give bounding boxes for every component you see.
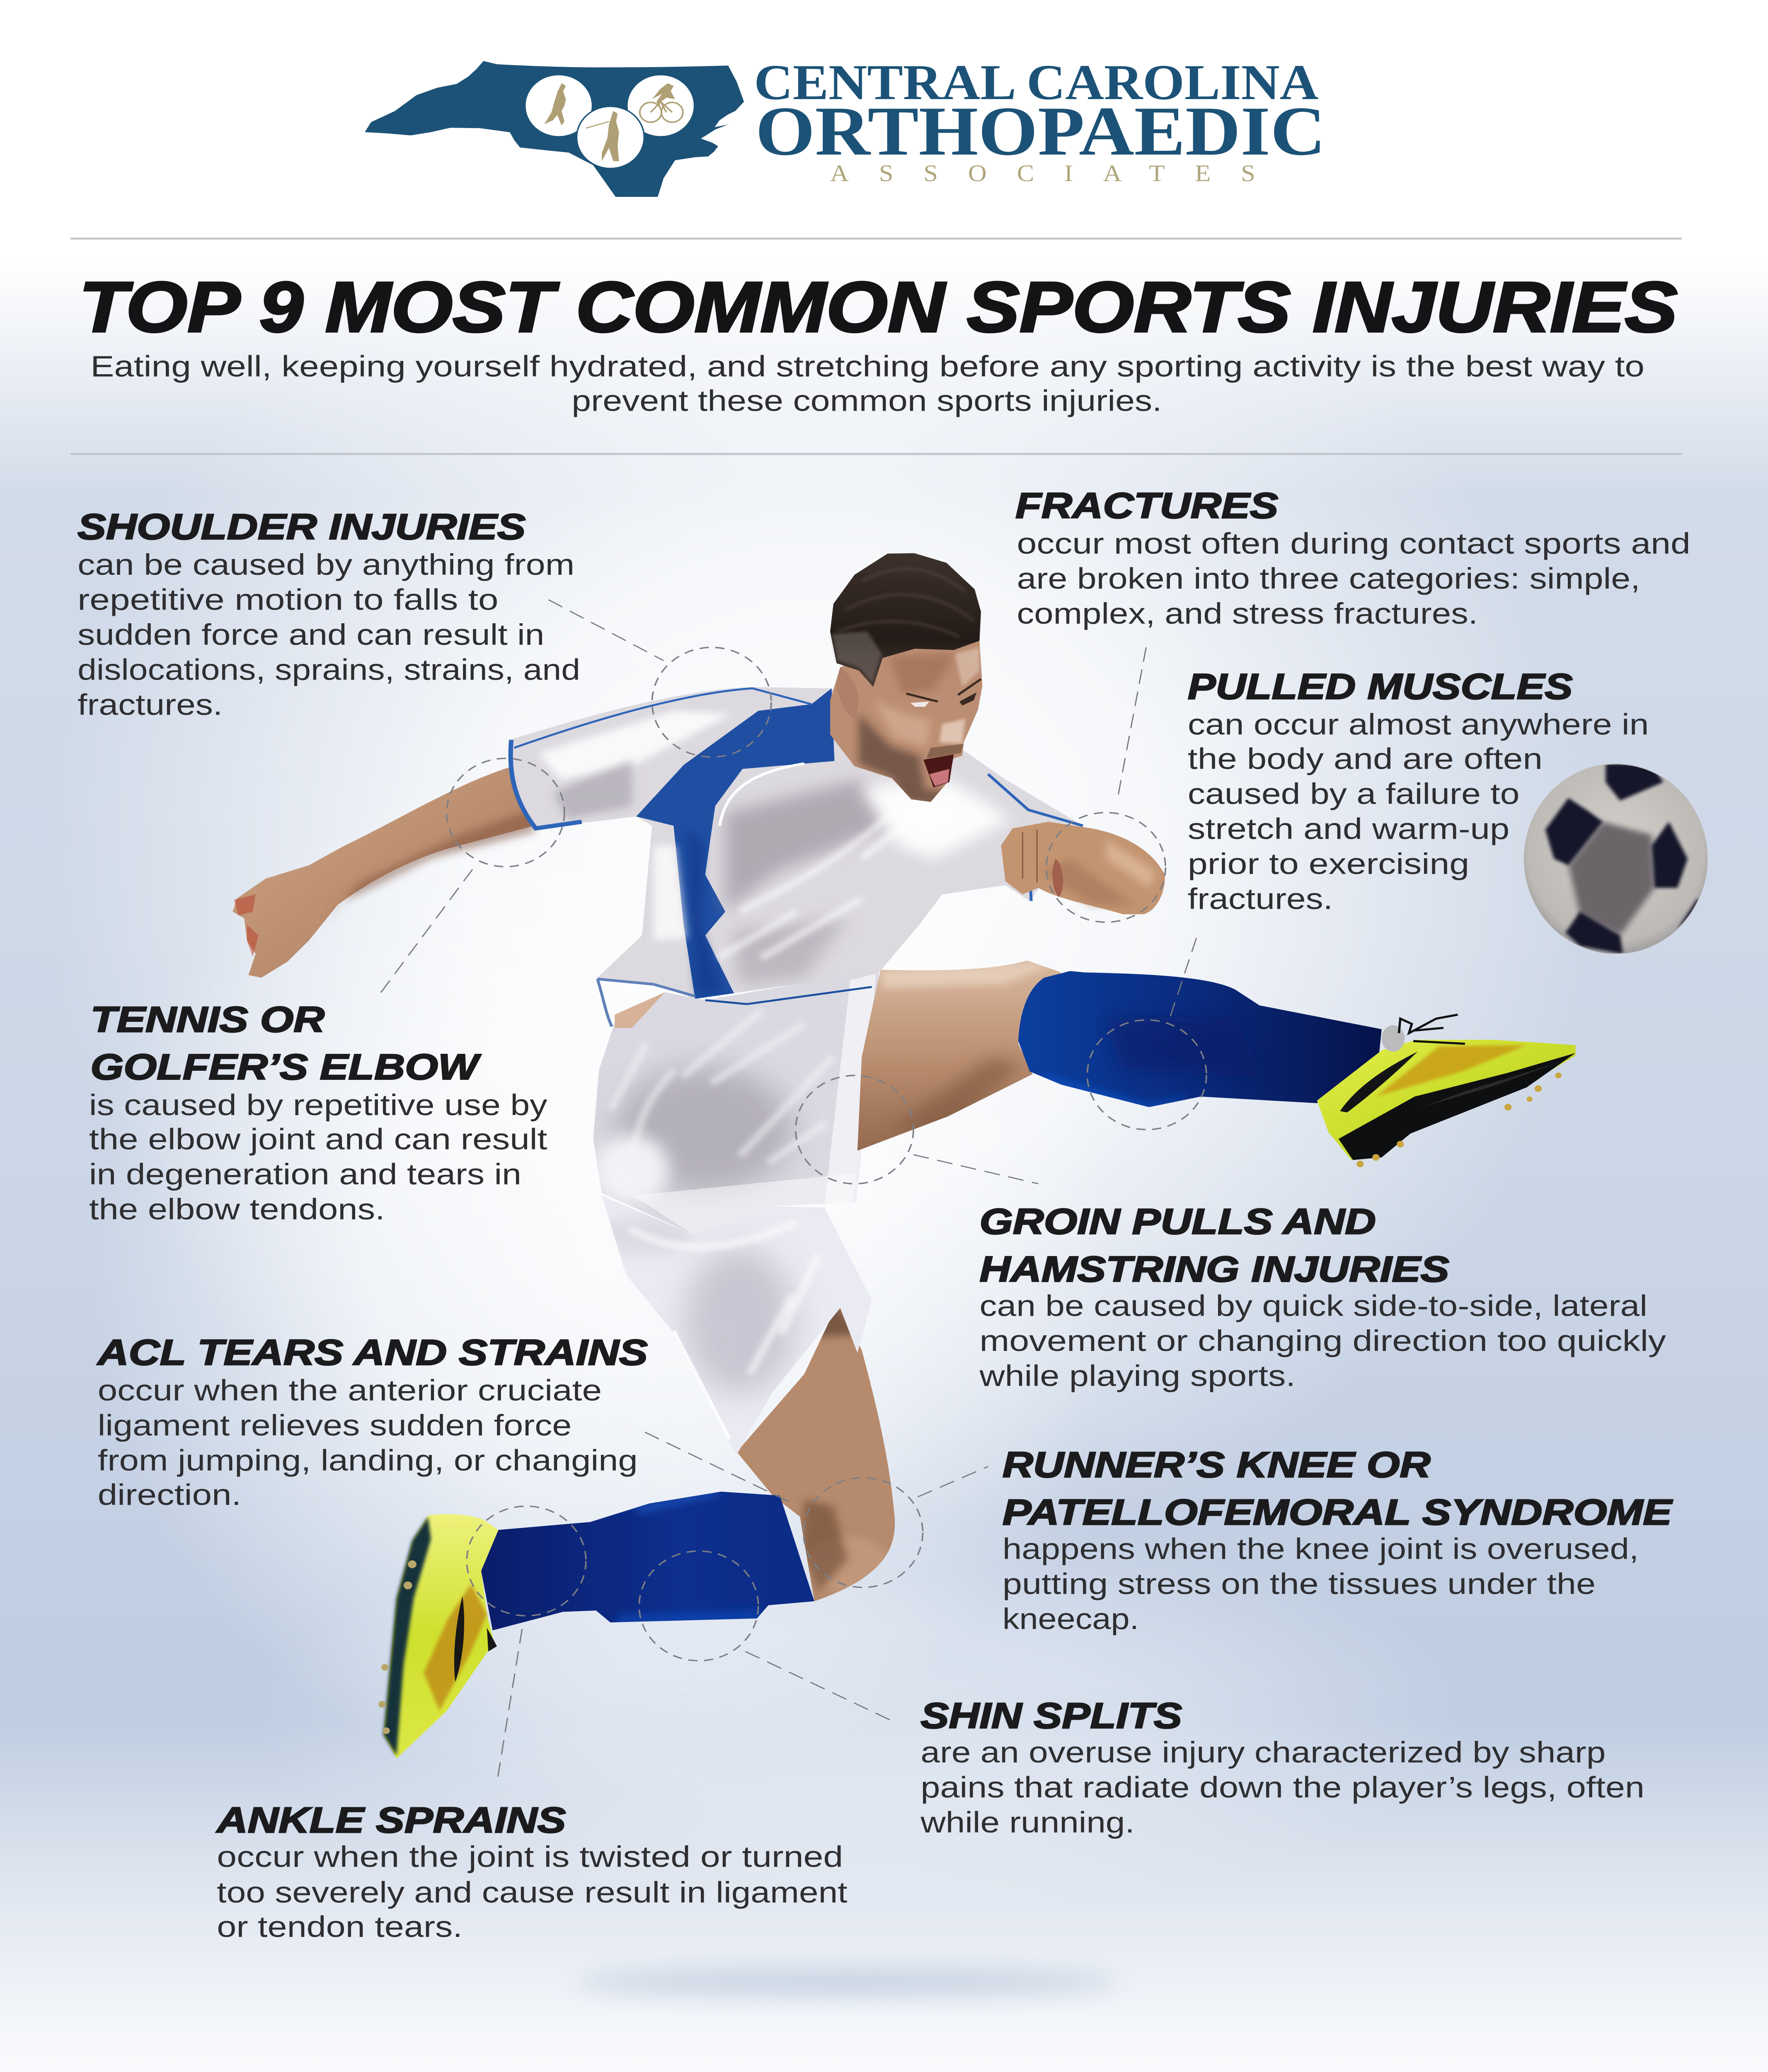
logo: Central Carolina Orthopaedic Associates <box>365 55 1326 197</box>
body text: movement or changing direction too quickly <box>979 1324 1666 1357</box>
panel: ACL tears and strains <box>97 1332 648 1511</box>
player lower shorts <box>601 1196 872 1455</box>
body text: can be caused by quick side-to-side, lateral <box>979 1289 1647 1322</box>
head: eyes and brows <box>906 679 981 707</box>
head: ear <box>837 667 859 719</box>
player raised shoe <box>1317 1015 1576 1167</box>
title: TOP 9 MOST COMMON SPORTS INJURIES <box>79 267 1678 347</box>
body text: is caused by repetitive use by <box>89 1088 547 1121</box>
heading: GROIN PULLS AND <box>979 1201 1376 1242</box>
intro text <box>90 350 1644 417</box>
heading: ANKLE SPRAINS <box>216 1800 566 1840</box>
logo circle: runner <box>526 75 592 136</box>
heading: SHOULDER INJURIES <box>78 506 526 547</box>
player lower shoe <box>378 1514 499 1758</box>
panel: pulled muscles <box>1188 666 1649 915</box>
body text: sudden force and can result in <box>78 618 544 651</box>
heading <box>979 1201 1449 1290</box>
heading: HAMSTRING INJURIES <box>979 1249 1449 1290</box>
logo circle: golfer <box>576 107 644 168</box>
player head <box>830 553 982 806</box>
injury marker: groin <box>796 1075 913 1184</box>
panel: groin pulls and hamstring injuries <box>979 1201 1666 1392</box>
leader line: ankle <box>497 1629 522 1782</box>
body text: pains that radiate down the player’s legs, often <box>920 1770 1644 1804</box>
injury marker: knee <box>804 1478 923 1588</box>
player raised sock <box>1018 971 1382 1116</box>
player right forearm and fist <box>1001 822 1165 914</box>
injury marker: wrist fracture <box>1046 813 1165 922</box>
body text: can occur almost anywhere in <box>1188 708 1649 741</box>
heading: TENNIS OR <box>90 999 325 1040</box>
body text: can be caused by anything from <box>78 548 574 581</box>
panel: shoulder injuries <box>78 506 580 721</box>
body text: direction. <box>98 1478 241 1511</box>
leader line: groin <box>913 1155 1039 1184</box>
body text: fractures. <box>78 688 223 721</box>
body text: are broken into three categories: simple, <box>1017 562 1640 595</box>
body text: putting stress on the tissues under the <box>1003 1567 1596 1600</box>
intro text: prevent these common sports injuries. <box>572 384 1162 417</box>
player lower thigh <box>737 1301 895 1601</box>
body text: occur when the anterior cruciate <box>98 1373 602 1407</box>
player upper shorts <box>593 970 879 1234</box>
body text: occur when the joint is twisted or turned <box>217 1840 843 1873</box>
panel: runner's knee <box>1003 1445 1673 1635</box>
logo wordmark line 1: CENTRAL CAROLINA <box>754 55 1318 110</box>
body text: complex, and stress fractures. <box>1017 597 1478 630</box>
player raised thigh <box>857 961 1061 1151</box>
logo wordmark line 3: ASSOCIATES <box>830 160 1255 186</box>
injury marker: shin <box>639 1551 758 1661</box>
body text: ligament relieves sudden force <box>98 1409 572 1442</box>
body text: happens when the knee joint is overused, <box>1003 1532 1639 1565</box>
leader line: ACL <box>645 1432 793 1503</box>
logo circle: cyclist <box>627 75 694 136</box>
leader line: runner's knee <box>918 1467 988 1497</box>
panel: tennis or golfer's elbow <box>89 999 547 1226</box>
leader line: shin <box>746 1651 894 1721</box>
body text <box>217 1840 848 1943</box>
player left arm and hand <box>233 766 534 978</box>
leader line: elbow <box>379 869 472 995</box>
leader line: shoulder <box>549 600 664 661</box>
heading: FRACTURES <box>1015 485 1278 526</box>
divider bottom <box>70 453 1682 455</box>
body text: or tendon tears. <box>217 1910 463 1943</box>
body text <box>979 1289 1666 1392</box>
panel: fractures <box>1015 485 1690 630</box>
body text: too severely and cause result in ligament <box>217 1876 848 1909</box>
body text <box>78 548 580 721</box>
heading: ACL TEARS AND STRAINS <box>97 1332 648 1373</box>
heading: PATELLOFEMORAL SYNDROME <box>1003 1492 1673 1532</box>
head: neck and face <box>830 641 982 806</box>
body text: the elbow joint and can result <box>89 1123 547 1156</box>
body text: caused by a failure to <box>1188 777 1519 810</box>
body text: occur most often during contact sports and <box>1017 527 1690 560</box>
heading <box>90 999 481 1087</box>
body text: the elbow tendons. <box>89 1193 385 1226</box>
body text <box>89 1088 547 1226</box>
leader line: pulled muscles <box>1169 938 1196 1020</box>
head: hair <box>830 553 981 687</box>
heading: PULLED MUSCLES <box>1188 666 1573 707</box>
leader line: fractures <box>1117 647 1146 799</box>
panel: ankle sprains <box>216 1800 848 1943</box>
body text: stretch and warm-up <box>1188 812 1509 845</box>
body text: are an overuse injury characterized by sharp <box>920 1736 1606 1769</box>
body text: while playing sports. <box>979 1359 1296 1392</box>
injury marker: elbow <box>447 758 564 867</box>
body text: the body and are often <box>1188 742 1543 775</box>
head: open mouth <box>923 754 954 787</box>
body text <box>1188 708 1649 915</box>
body text: fractures. <box>1188 882 1333 915</box>
player shirt <box>510 687 1083 1028</box>
body text: prior to exercising <box>1188 847 1469 880</box>
body text <box>1003 1532 1639 1635</box>
body text: while running. <box>920 1806 1135 1839</box>
body text: in degeneration and tears in <box>89 1157 521 1191</box>
body text <box>920 1736 1644 1839</box>
body text <box>98 1373 638 1511</box>
body text <box>1017 527 1690 630</box>
divider top <box>70 237 1682 240</box>
player lower sock <box>481 1489 814 1630</box>
logo map of North Carolina <box>365 61 744 197</box>
injury marker: shoulder <box>652 647 771 757</box>
injury marker: ankle <box>467 1506 586 1616</box>
heading: SHIN SPLITS <box>920 1696 1182 1736</box>
soccer ball <box>1524 764 1709 954</box>
body text: repetitive motion to falls to <box>78 583 499 616</box>
heading: GOLFER’S ELBOW <box>90 1047 481 1087</box>
injury marker: calf pulled muscle <box>1087 1020 1206 1130</box>
panel: shin splits <box>920 1696 1644 1839</box>
body text: dislocations, sprains, strains, and <box>78 653 580 686</box>
logo wordmark line 2: ORTHOPAEDIC <box>756 93 1326 170</box>
heading <box>1003 1445 1673 1532</box>
heading: RUNNER’S KNEE OR <box>1003 1445 1431 1485</box>
body text: kneecap. <box>1003 1602 1139 1635</box>
body text: from jumping, landing, or changing <box>98 1443 638 1477</box>
player <box>233 553 1576 1758</box>
intro text: Eating well, keeping yourself hydrated, and stretching before any sporting activity is the best way to <box>90 350 1644 383</box>
